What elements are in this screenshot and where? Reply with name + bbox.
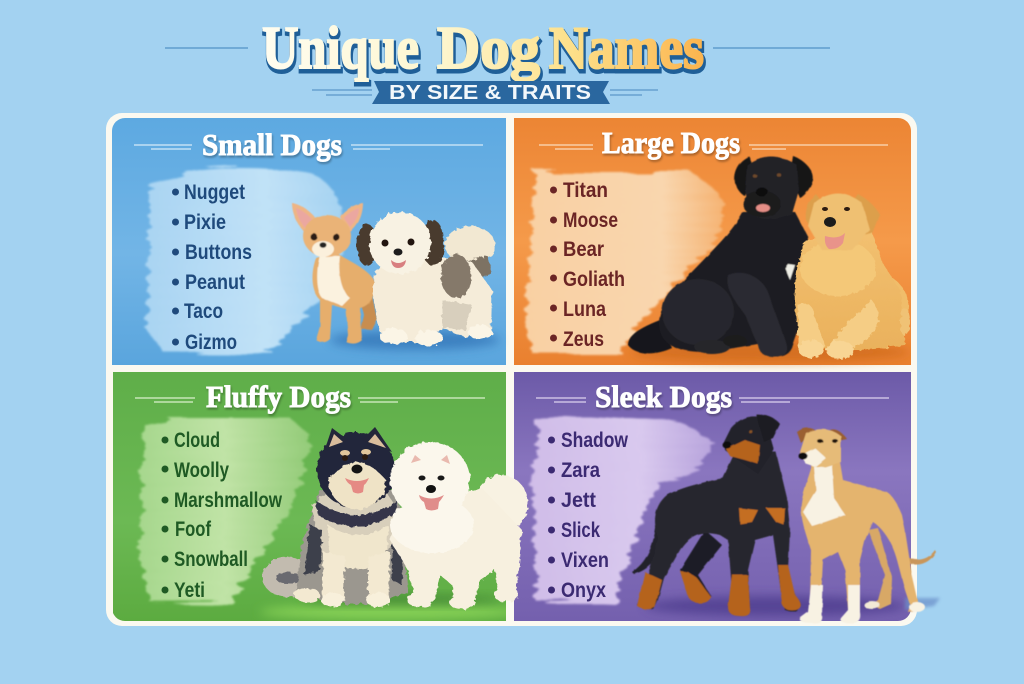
subtitle banner — [312, 81, 658, 104]
name list: small dogs: Buttons — [185, 241, 252, 264]
title decorative rule right — [713, 47, 830, 49]
name list: sleek dogs: Onyx — [561, 579, 606, 602]
title: Unique — [262, 15, 419, 81]
name list: small dogs: Nugget — [184, 181, 245, 204]
title: Names — [549, 15, 704, 81]
name list: sleek dogs: Slick — [561, 519, 600, 542]
name list: fluffy dogs: Marshmallow — [174, 489, 283, 512]
panel: fluffy dogs — [113, 372, 528, 621]
name list: small dogs: Peanut — [185, 271, 245, 294]
name list: fluffy dogs — [162, 429, 283, 602]
heading: sleek dogs — [536, 379, 889, 414]
dog: shih tzu — [357, 212, 495, 346]
brush patch: large dogs — [525, 172, 722, 354]
panel: small dogs — [112, 118, 506, 365]
dog: whippet — [797, 428, 936, 623]
name list: sleek dogs: Jett — [561, 489, 596, 512]
title: Unique — [263, 18, 420, 84]
name list: fluffy dogs: Yeti — [174, 579, 205, 602]
panel: sleek dogs — [514, 372, 940, 623]
heading: small dogs: Small Dogs — [202, 127, 342, 162]
brush patch: small dogs — [147, 168, 345, 354]
dog: doberman — [632, 414, 801, 616]
heading: sleek dogs: Sleek Dogs — [595, 379, 732, 414]
heading: large dogs: Large Dogs — [602, 125, 740, 160]
infographic canvas — [106, 25, 940, 626]
brush patch: fluffy dogs — [140, 418, 310, 603]
name list: sleek dogs: Vixen — [561, 549, 609, 572]
heading: fluffy dogs — [135, 379, 485, 414]
name list: large dogs — [550, 179, 625, 351]
heading: small dogs — [134, 127, 483, 162]
name list: large dogs: Luna — [563, 298, 606, 321]
subtitle banner: BY SIZE & TRAITS — [389, 82, 591, 104]
panel: large dogs — [514, 118, 911, 365]
title block — [165, 15, 830, 104]
name list: fluffy dogs: Woolly — [174, 459, 229, 482]
dog: husky — [262, 427, 408, 607]
dog: black labrador — [628, 156, 813, 357]
dog: chihuahua — [292, 203, 377, 344]
name list: small dogs: Pixie — [184, 211, 226, 234]
name list: sleek dogs: Shadow — [561, 429, 629, 452]
heading: fluffy dogs: Fluffy Dogs — [206, 379, 351, 414]
name list: large dogs: Bear — [563, 238, 604, 261]
title — [262, 15, 705, 84]
name list: fluffy dogs: Foof — [175, 518, 212, 541]
title: Dog — [438, 18, 541, 84]
name list: sleek dogs: Zara — [561, 459, 600, 482]
name list: large dogs: Goliath — [563, 268, 625, 291]
name list: large dogs: Zeus — [563, 328, 604, 351]
title decorative rule left — [165, 47, 248, 49]
name list: sleek dogs — [548, 429, 629, 602]
name list: large dogs: Moose — [563, 209, 618, 232]
heading: large dogs — [539, 125, 888, 160]
dog: samoyed — [390, 442, 528, 609]
white card — [106, 113, 917, 626]
title: Dog — [437, 15, 540, 81]
name list: small dogs: Gizmo — [185, 331, 237, 354]
title: Names — [550, 18, 705, 84]
name list: small dogs — [172, 181, 252, 354]
name list: fluffy dogs: Cloud — [174, 429, 220, 452]
dog: golden retriever — [795, 194, 910, 359]
name list: fluffy dogs: Snowball — [174, 548, 248, 571]
brush patch: sleek dogs — [532, 415, 713, 603]
name list: small dogs: Taco — [184, 300, 223, 323]
name list: large dogs: Titan — [563, 179, 608, 202]
